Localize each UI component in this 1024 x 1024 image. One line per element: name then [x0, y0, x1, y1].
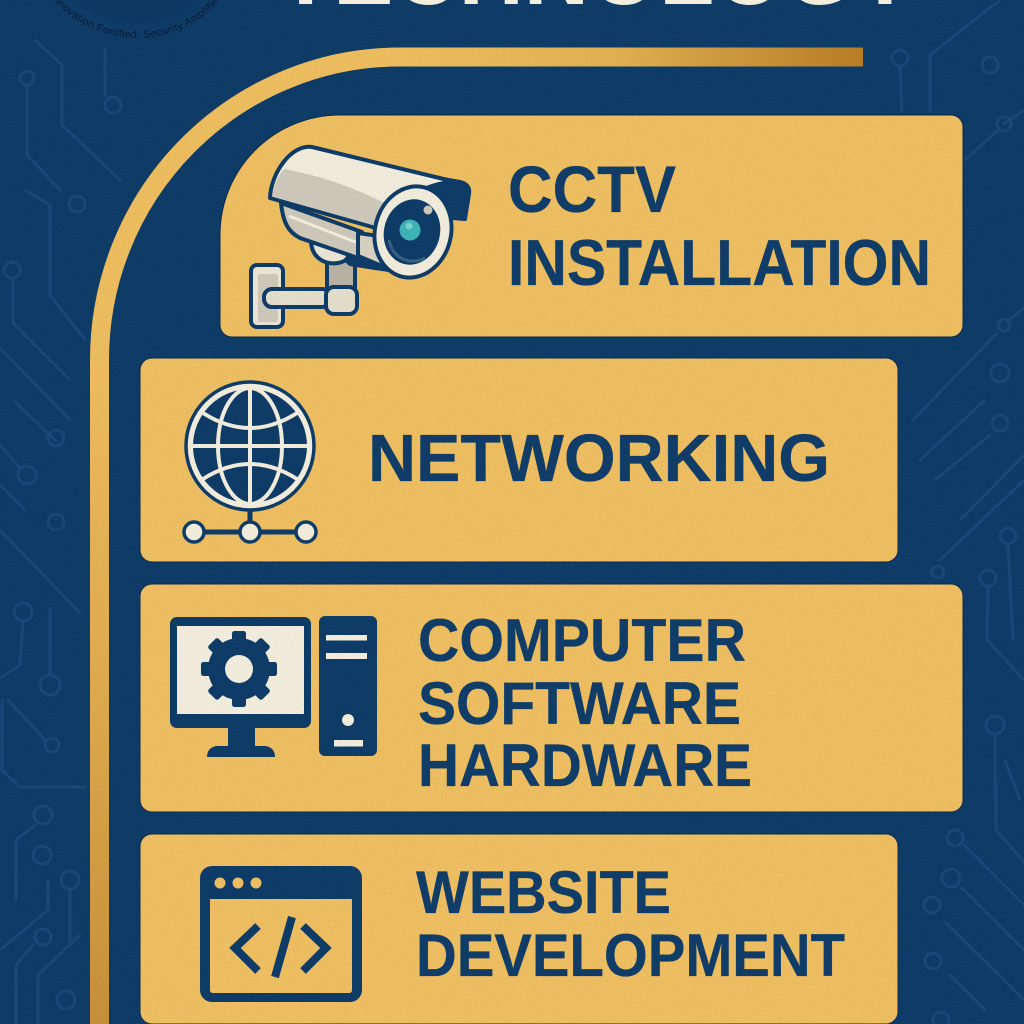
label: Website Development	[416, 859, 845, 989]
label: Networking: NETWORKING	[368, 421, 830, 496]
label: CCTV Installation: CCTV	[508, 152, 676, 226]
icon: computer with gear	[170, 616, 377, 757]
gold arc frame	[100, 57, 863, 1024]
label: Computer Software Hardware: HARDWARE	[418, 732, 752, 799]
label: Computer Software Hardware: COMPUTER	[418, 607, 746, 674]
logo seal	[54, 0, 220, 40]
panel: website development	[140, 834, 898, 1024]
label: Computer Software Hardware: SOFTWARE	[418, 670, 741, 737]
label: CCTV Installation: INSTALLATION	[508, 226, 931, 299]
panel: computer software hardware	[140, 584, 963, 812]
icon: CCTV camera	[251, 147, 469, 327]
label: Website Development: DEVELOPMENT	[416, 922, 845, 989]
label: Computer Software Hardware	[418, 607, 752, 799]
label: Website Development: WEBSITE	[416, 859, 671, 926]
icon: code browser window	[200, 866, 362, 1002]
panel: networking	[140, 358, 898, 562]
label: CCTV Installation	[508, 152, 931, 299]
icon: globe network	[184, 382, 316, 542]
panel: CCTV installation	[220, 115, 963, 337]
